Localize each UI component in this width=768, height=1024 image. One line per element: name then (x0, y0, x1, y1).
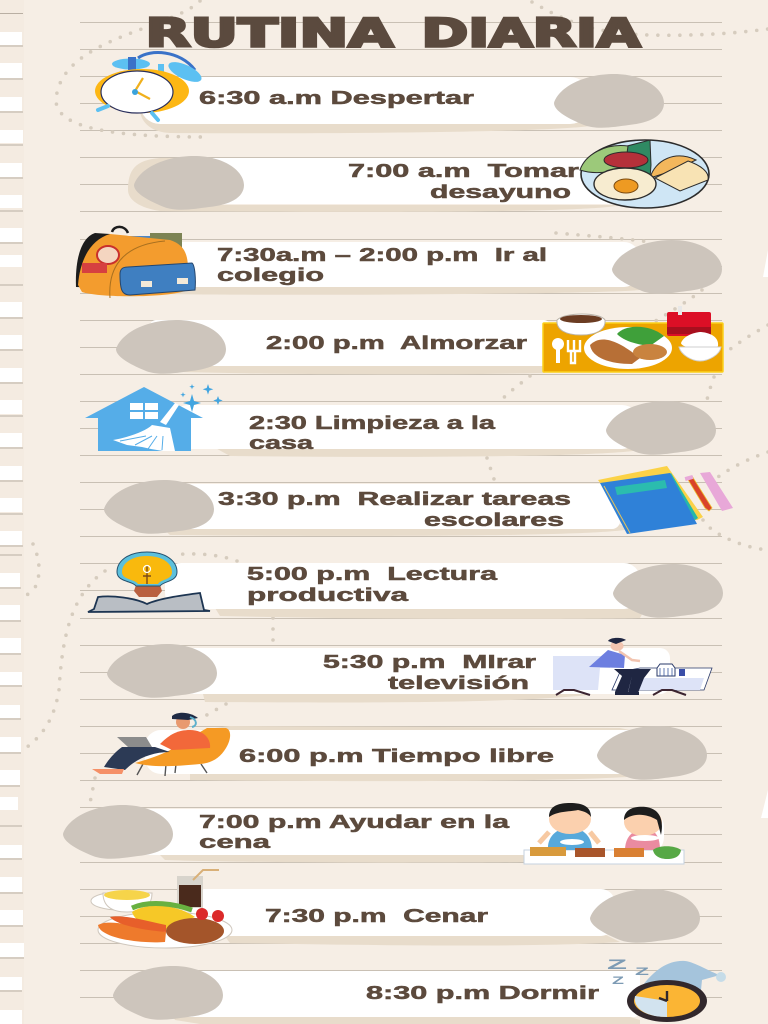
icon: person on sofa (553, 638, 712, 695)
row: 7:00 Tomar desayuno: 7:00 a.m Tomar (348, 161, 579, 181)
row: 5:30 Mirar televisión (107, 638, 712, 702)
row: 7:00 Ayudar en la cena: cena (199, 832, 272, 852)
title: DIARIA (422, 12, 640, 56)
icon: light bulb and book (88, 552, 210, 612)
row: 5:30 Mirar televisión: 5:30 p.m MIrar (323, 652, 536, 672)
row: 5:00 Lectura productiva (88, 552, 723, 619)
row: 7:00 Ayudar en la cena (63, 803, 684, 864)
icon: children serving dinner (524, 803, 684, 864)
row: 6:30 Despertar (95, 53, 664, 133)
row: 5:00 Lectura productiva: 5:00 p.m Lectura (247, 564, 499, 584)
icon: alarm clock (95, 53, 204, 120)
row: 2:30 Limpieza a la casa: 2:30 Limpieza a la (249, 413, 497, 433)
row: 6:00 Tiempo libre (92, 713, 707, 781)
row: 8:30 Dormir (113, 956, 726, 1024)
row: 5:30 Mirar televisión: televisión (388, 673, 529, 693)
icon: dinner plate and drink (91, 870, 232, 948)
row: 3:30 Realizar tareas escolares: 3:30 p.m Realizar tareas (218, 489, 571, 509)
icon: house and broom (85, 384, 223, 451)
icon: sleeping clock with nightcap: Z (635, 966, 650, 978)
row: 2:00 Almorzar (116, 306, 723, 374)
row: 7:00 Tomar desayuno (128, 140, 709, 212)
row: 3:30 Realizar tareas escolares: escolares (424, 510, 564, 530)
icon: sleeping clock with nightcap: Z (612, 975, 624, 987)
row: 8:30 Dormir: 8:30 p.m Dormir (366, 983, 599, 1003)
dotted route lines (23, 1, 768, 808)
icon: sleeping clock with nightcap: Z (607, 956, 628, 972)
row: 7:30 Cenar (91, 870, 700, 948)
row: 2:00 Almorzar: 2:00 p.m Almorzar (266, 333, 527, 353)
row: 6:00 Tiempo libre: 6:00 p.m Tiempo libre (239, 746, 554, 766)
row: 7:00 Ayudar en la cena: 7:00 p.m Ayudar en la (199, 812, 511, 832)
title (146, 12, 640, 56)
title: RUTINA (146, 12, 394, 56)
row: 7:00 Tomar desayuno: desayuno (430, 182, 571, 202)
icon: lunch tray (543, 306, 723, 372)
icon: notebooks and rulers (598, 466, 733, 534)
row: 2:30 Limpieza a la casa (85, 384, 716, 457)
row: 6:30 Despertar: 6:30 a.m Despertar (199, 88, 474, 108)
row: 5:00 Lectura productiva: productiva (247, 585, 410, 605)
row: 7:30 Ir al colegio: colegio (217, 265, 324, 285)
icon: breakfast plate (580, 140, 709, 208)
icon: backpack (76, 227, 195, 298)
icon: person relaxing in chair (92, 713, 230, 776)
row: 7:30 Ir al colegio (76, 227, 722, 298)
row: 7:30 Cenar: 7:30 p.m Cenar (265, 906, 488, 926)
row: 7:30 Ir al colegio: 7:30a.m – 2:00 p.m Ir al (217, 245, 547, 265)
icon: sleeping clock with nightcap (607, 956, 726, 1022)
row: 2:30 Limpieza a la casa: casa (249, 433, 315, 453)
row: 3:30 Realizar tareas escolares (104, 466, 733, 536)
